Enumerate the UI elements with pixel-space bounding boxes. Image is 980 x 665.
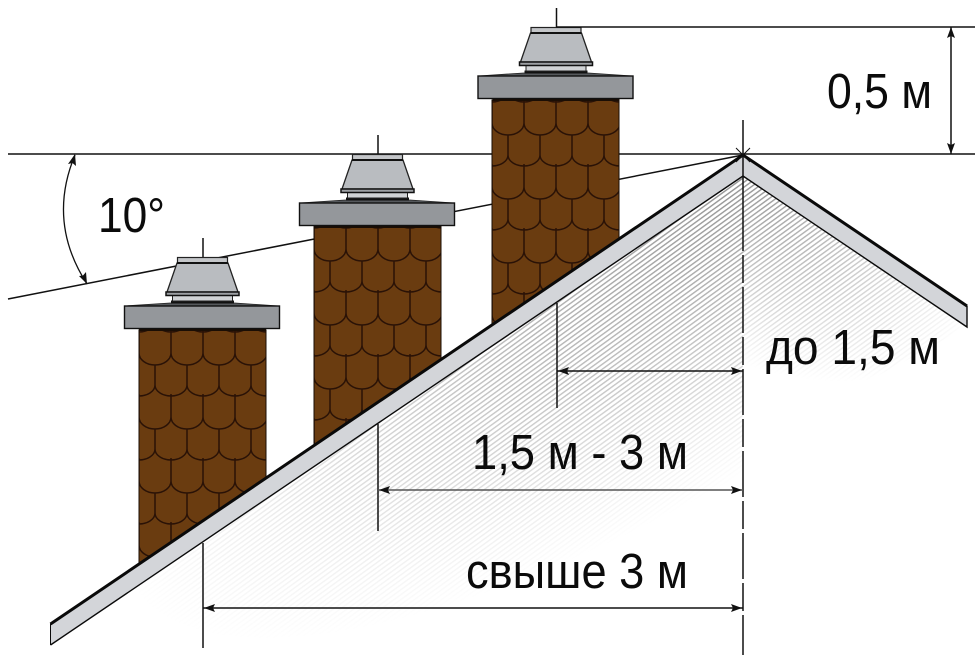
label: 1.5 to 3 m: 1,5 м - 3 м [472, 426, 688, 480]
label: 0,5 m: 0,5 м [827, 65, 932, 119]
label: up to 1.5 m: до 1,5 м [766, 321, 940, 375]
chimney 1: below the line [124, 238, 280, 564]
dimension: up to 1.5 m [557, 303, 743, 408]
hatching: left roof interior [192, 178, 743, 596]
chimney 3: above the ridge [478, 8, 633, 325]
dimension: over 3 m [203, 543, 743, 648]
hatching: right roof interior [743, 177, 948, 368]
ridge axis line [736, 120, 750, 655]
label: over 3 m: свыше 3 м [466, 545, 688, 599]
dimension: 1.5 to 3 m [378, 424, 743, 531]
chimney 2: on the line [300, 135, 454, 445]
roof slab [50, 155, 967, 645]
label: 10 degrees: 10° [98, 189, 165, 243]
10 degree sight line [8, 155, 743, 299]
dimension: 0.5 m height [556, 27, 975, 154]
horizon reference line [8, 153, 975, 155]
angle arc: 10 degrees [63, 154, 87, 284]
